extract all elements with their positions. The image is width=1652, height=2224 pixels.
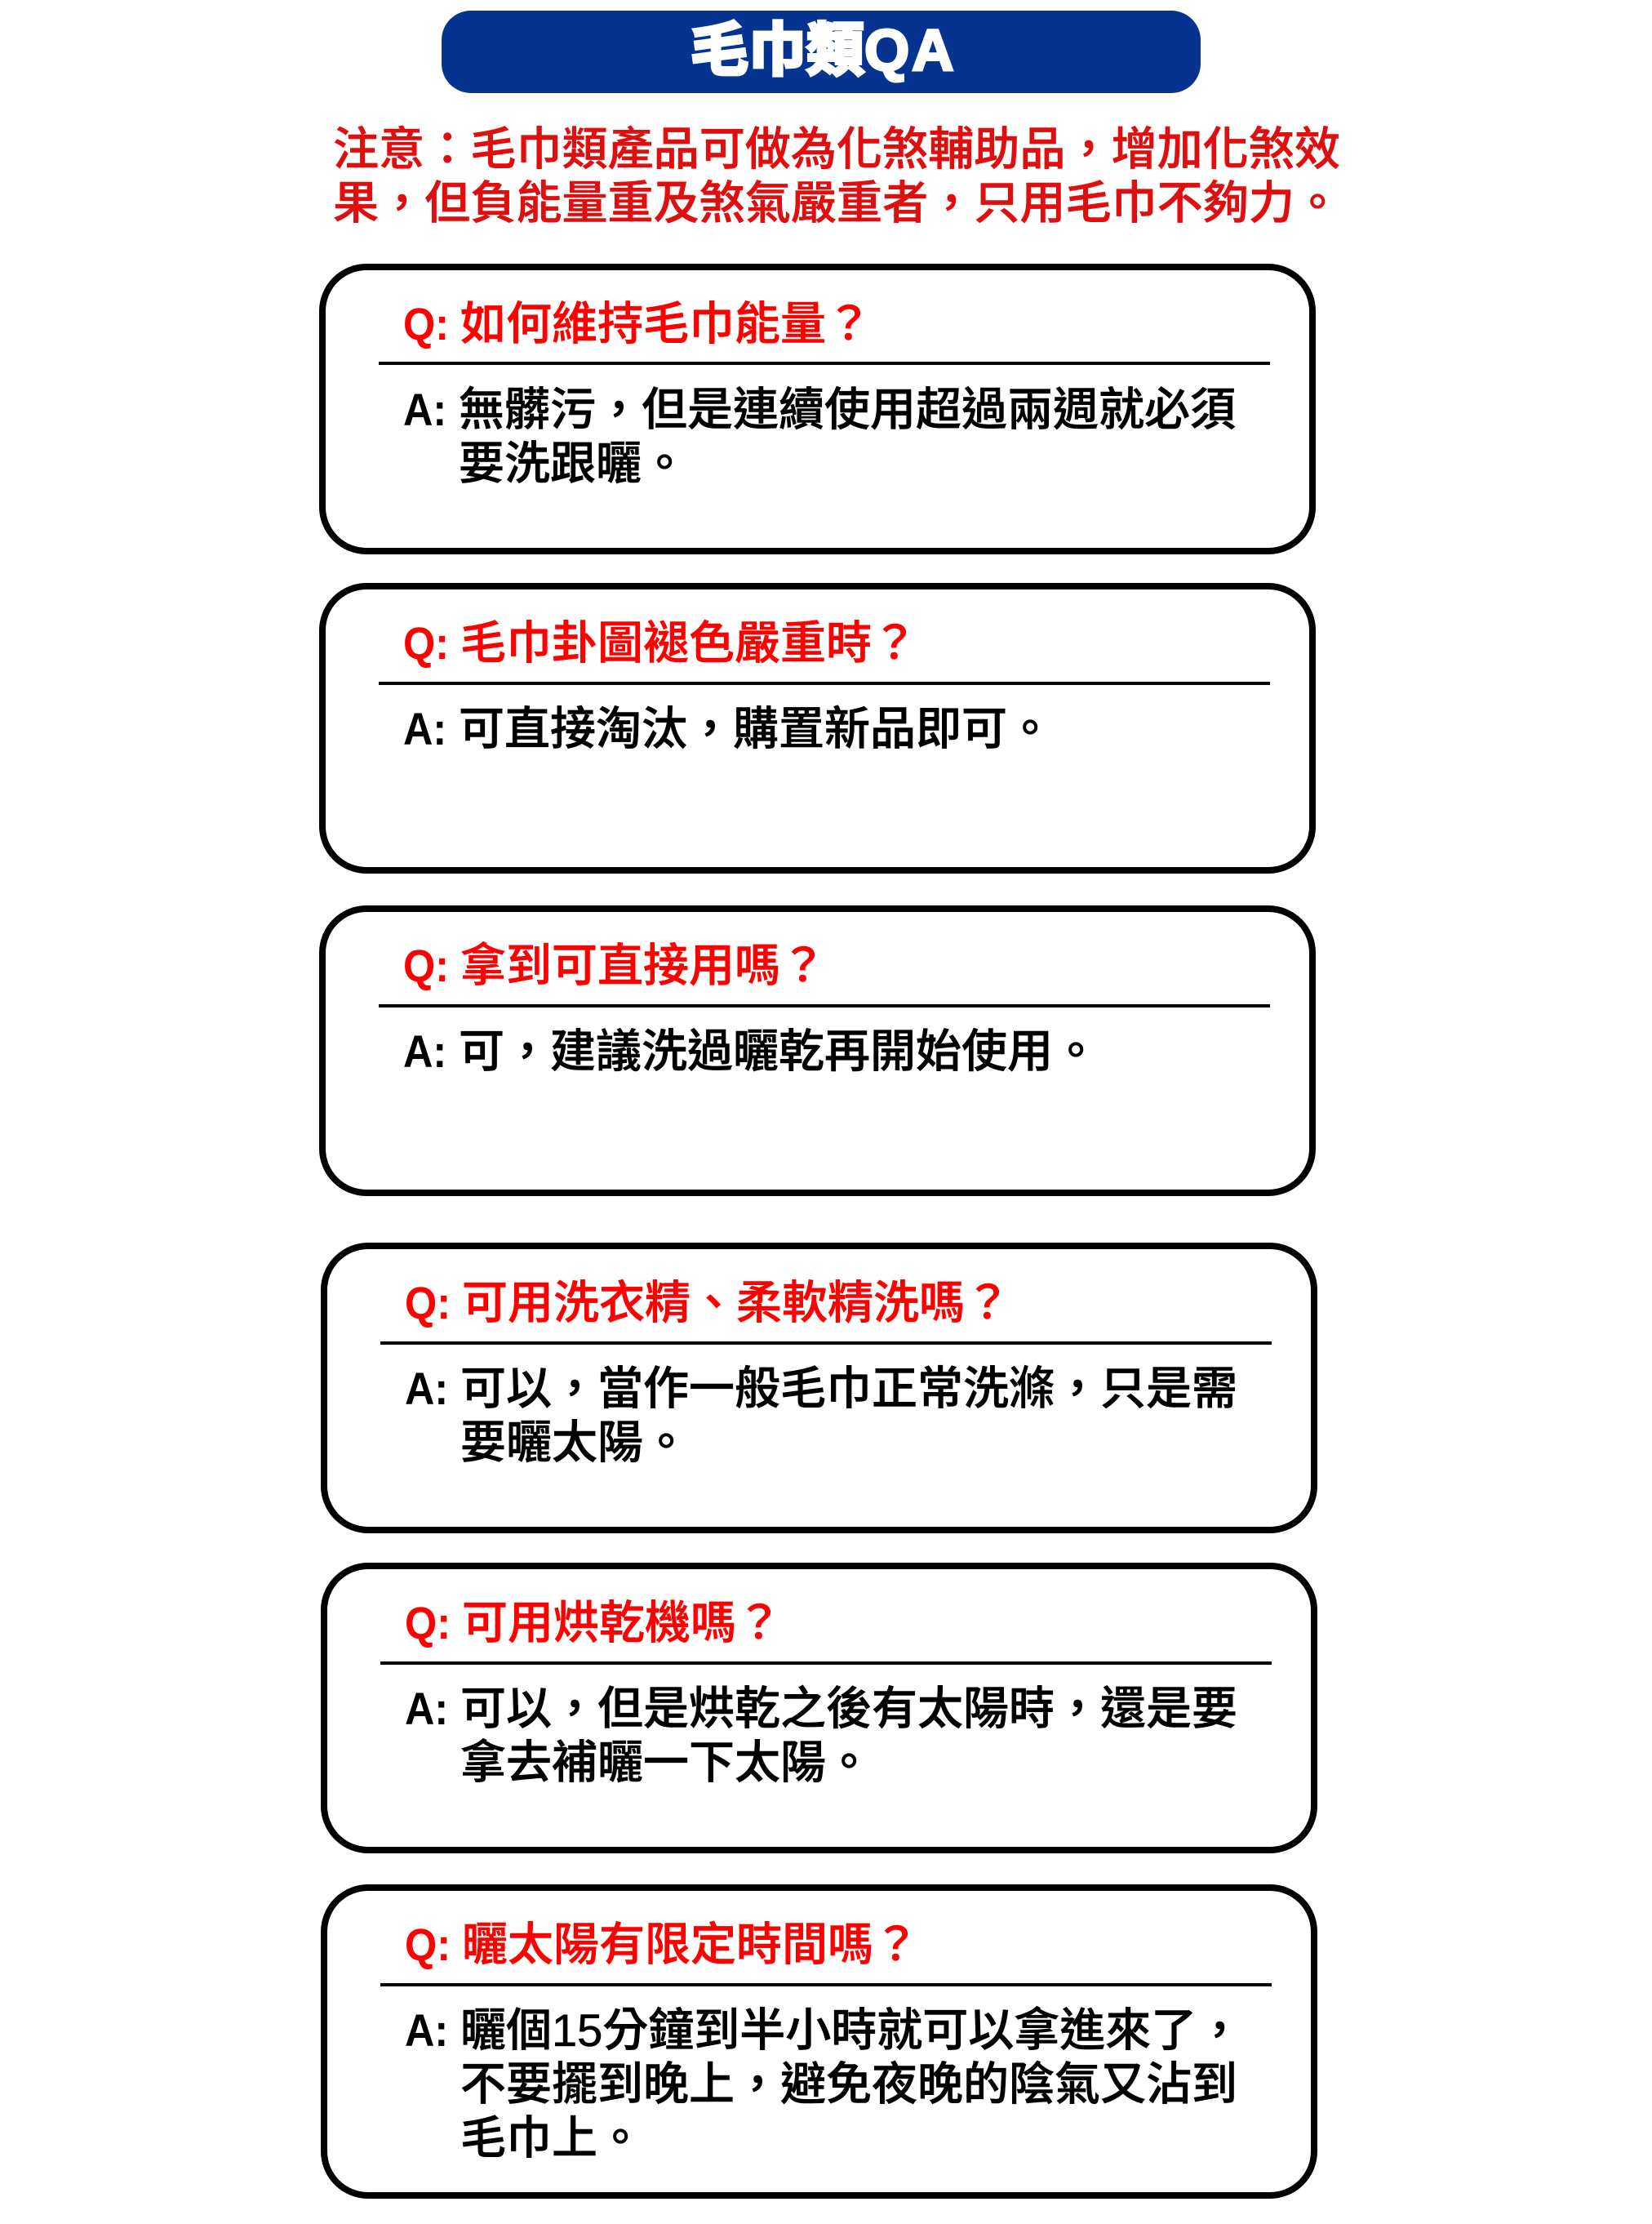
- answer 3: 可，建議洗過曬乾再開始使用。: [459, 1025, 1099, 1077]
- answer 4: 要曬太陽。: [460, 1417, 689, 1468]
- answer 4: [405, 1363, 1237, 1468]
- answer 3: A:: [403, 1025, 446, 1077]
- question 3: Q:: [403, 940, 449, 991]
- answer 6: A:: [405, 2004, 448, 2056]
- answer 1: 無髒污，但是連續使用超過兩週就必須: [459, 384, 1236, 435]
- panel: Q&A 3: [319, 905, 1316, 1196]
- panel: Q&A 6: [321, 1884, 1317, 2199]
- question 6: Q:: [405, 1919, 451, 1970]
- question 4: 可用洗衣精、柔軟精洗嗎？: [462, 1277, 1010, 1328]
- answer 5: [405, 1683, 1237, 1788]
- panel: Q&A 5: [321, 1563, 1317, 1853]
- notice text: 果，但負能量重及煞氣嚴重者，只用毛巾不夠力。: [333, 177, 1340, 229]
- question 3: 拿到可直接用嗎？: [460, 940, 826, 991]
- answer 5: 拿去補曬一下太陽。: [460, 1737, 872, 1788]
- question 6: 曬太陽有限定時間嗎？: [462, 1919, 919, 1970]
- answer 5: 可以，但是烘乾之後有太陽時，還是要: [460, 1683, 1237, 1734]
- title banner: [442, 11, 1201, 93]
- question 4: Q:: [405, 1277, 451, 1328]
- answer 5: A:: [405, 1683, 448, 1734]
- answer 2: 可直接淘汰，購置新品即可。: [459, 703, 1053, 754]
- notice text: 注意：毛巾類產品可做為化煞輔助品，增加化煞效: [333, 123, 1340, 175]
- title text: 毛巾類QA: [691, 19, 957, 83]
- answer 4: 可以，當作一般毛巾正常洗滌，只是需: [460, 1363, 1237, 1414]
- panel: Q&A 1: [319, 264, 1316, 554]
- answer 6: [405, 2004, 1242, 2164]
- answer 6: 不要擺到晚上，避免夜晚的陰氣又沾到: [460, 2058, 1237, 2110]
- panel: Q&A 2: [319, 583, 1316, 874]
- answer 6: 毛巾上。: [460, 2112, 643, 2164]
- question 5: 可用烘乾機嗎？: [462, 1597, 782, 1648]
- answer 1: [403, 384, 1236, 489]
- answer 4: A:: [405, 1363, 448, 1414]
- answer 1: 要洗跟曬。: [459, 438, 687, 489]
- question 1: 如何維持毛巾能量？: [460, 298, 872, 349]
- answer 6: 曬個15分鐘到半小時就可以拿進來了，: [460, 2004, 1242, 2056]
- question 1: Q:: [403, 298, 449, 349]
- question 2: 毛巾卦圖褪色嚴重時？: [460, 617, 917, 669]
- notice text: [333, 123, 1340, 229]
- question 2: Q:: [403, 617, 449, 669]
- question 5: Q:: [405, 1597, 451, 1648]
- answer 2: A:: [403, 703, 446, 754]
- panel: Q&A 4: [321, 1243, 1317, 1533]
- answer 1: A:: [403, 384, 446, 435]
